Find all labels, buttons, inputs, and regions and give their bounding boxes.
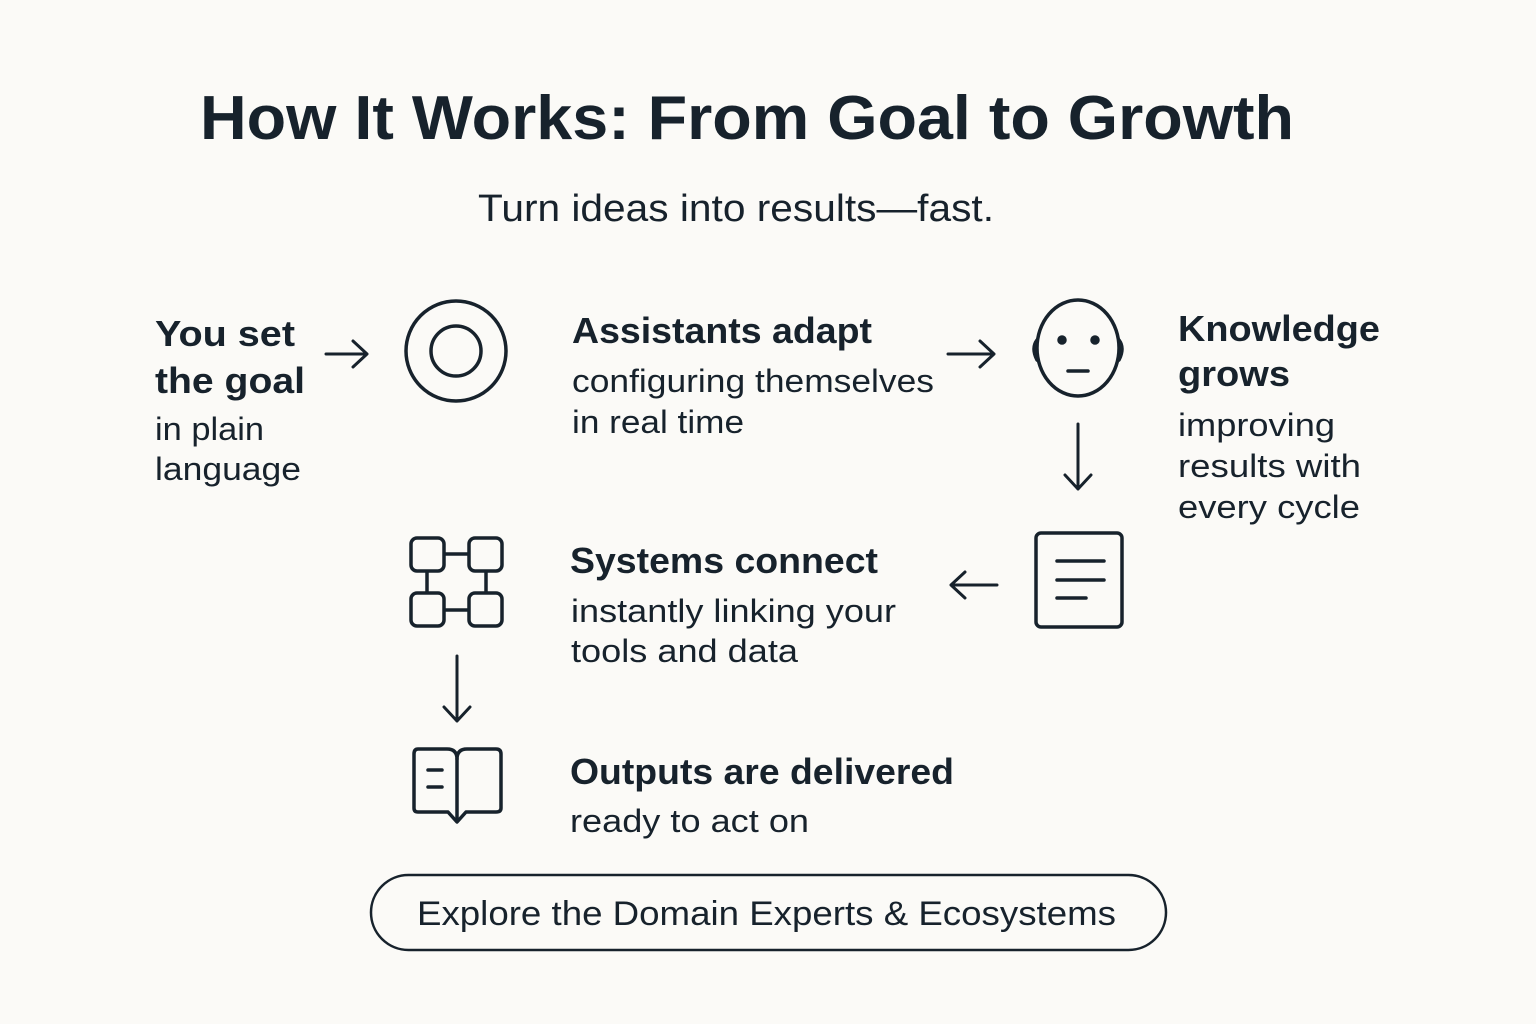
arrow: down 1 — [1065, 424, 1091, 489]
step: knowledge grows — [1178, 308, 1380, 525]
step: systems connect: Systems connect — [570, 540, 878, 581]
arrow: right 1 — [326, 341, 367, 367]
step: knowledge grows: improving — [1178, 407, 1335, 443]
arrow: right 2 — [948, 341, 994, 367]
step: knowledge grows: results with — [1178, 448, 1361, 484]
button: explore: Explore the Domain Experts & Ecosystems — [417, 895, 1116, 933]
step: systems connect: instantly linking your — [571, 593, 896, 629]
title: How It Works: From Goal to Growth — [200, 84, 1294, 153]
icon: document — [1036, 533, 1122, 627]
step: systems connect — [570, 540, 896, 669]
step: assistants adapt: configuring themselves — [572, 363, 934, 399]
step: systems connect: tools and data — [571, 633, 798, 669]
step: outputs are delivered: ready to act on — [570, 803, 809, 839]
arrow: left — [951, 572, 997, 598]
step: outputs are delivered: Outputs are delivered — [570, 751, 954, 792]
step: assistants adapt: in real time — [572, 404, 744, 440]
icon: target — [406, 301, 506, 401]
step: you set the goal: You set — [155, 313, 295, 354]
step: outputs are delivered — [570, 751, 954, 839]
icon: face — [1034, 300, 1122, 396]
step: knowledge grows: grows — [1178, 353, 1290, 394]
icon: book — [414, 749, 501, 822]
subtitle: Turn ideas into results—fast. — [478, 188, 994, 230]
step: assistants adapt — [572, 310, 934, 440]
step: knowledge grows: Knowledge — [1178, 308, 1380, 349]
button: explore — [371, 875, 1166, 950]
step: you set the goal: language — [155, 451, 301, 487]
step: you set the goal — [155, 313, 305, 487]
step: you set the goal: in plain — [155, 411, 264, 447]
step: assistants adapt: Assistants adapt — [572, 310, 872, 351]
arrow: down 2 — [444, 656, 470, 721]
icon: network — [411, 538, 502, 626]
step: knowledge grows: every cycle — [1178, 489, 1360, 525]
step: you set the goal: the goal — [155, 360, 305, 401]
